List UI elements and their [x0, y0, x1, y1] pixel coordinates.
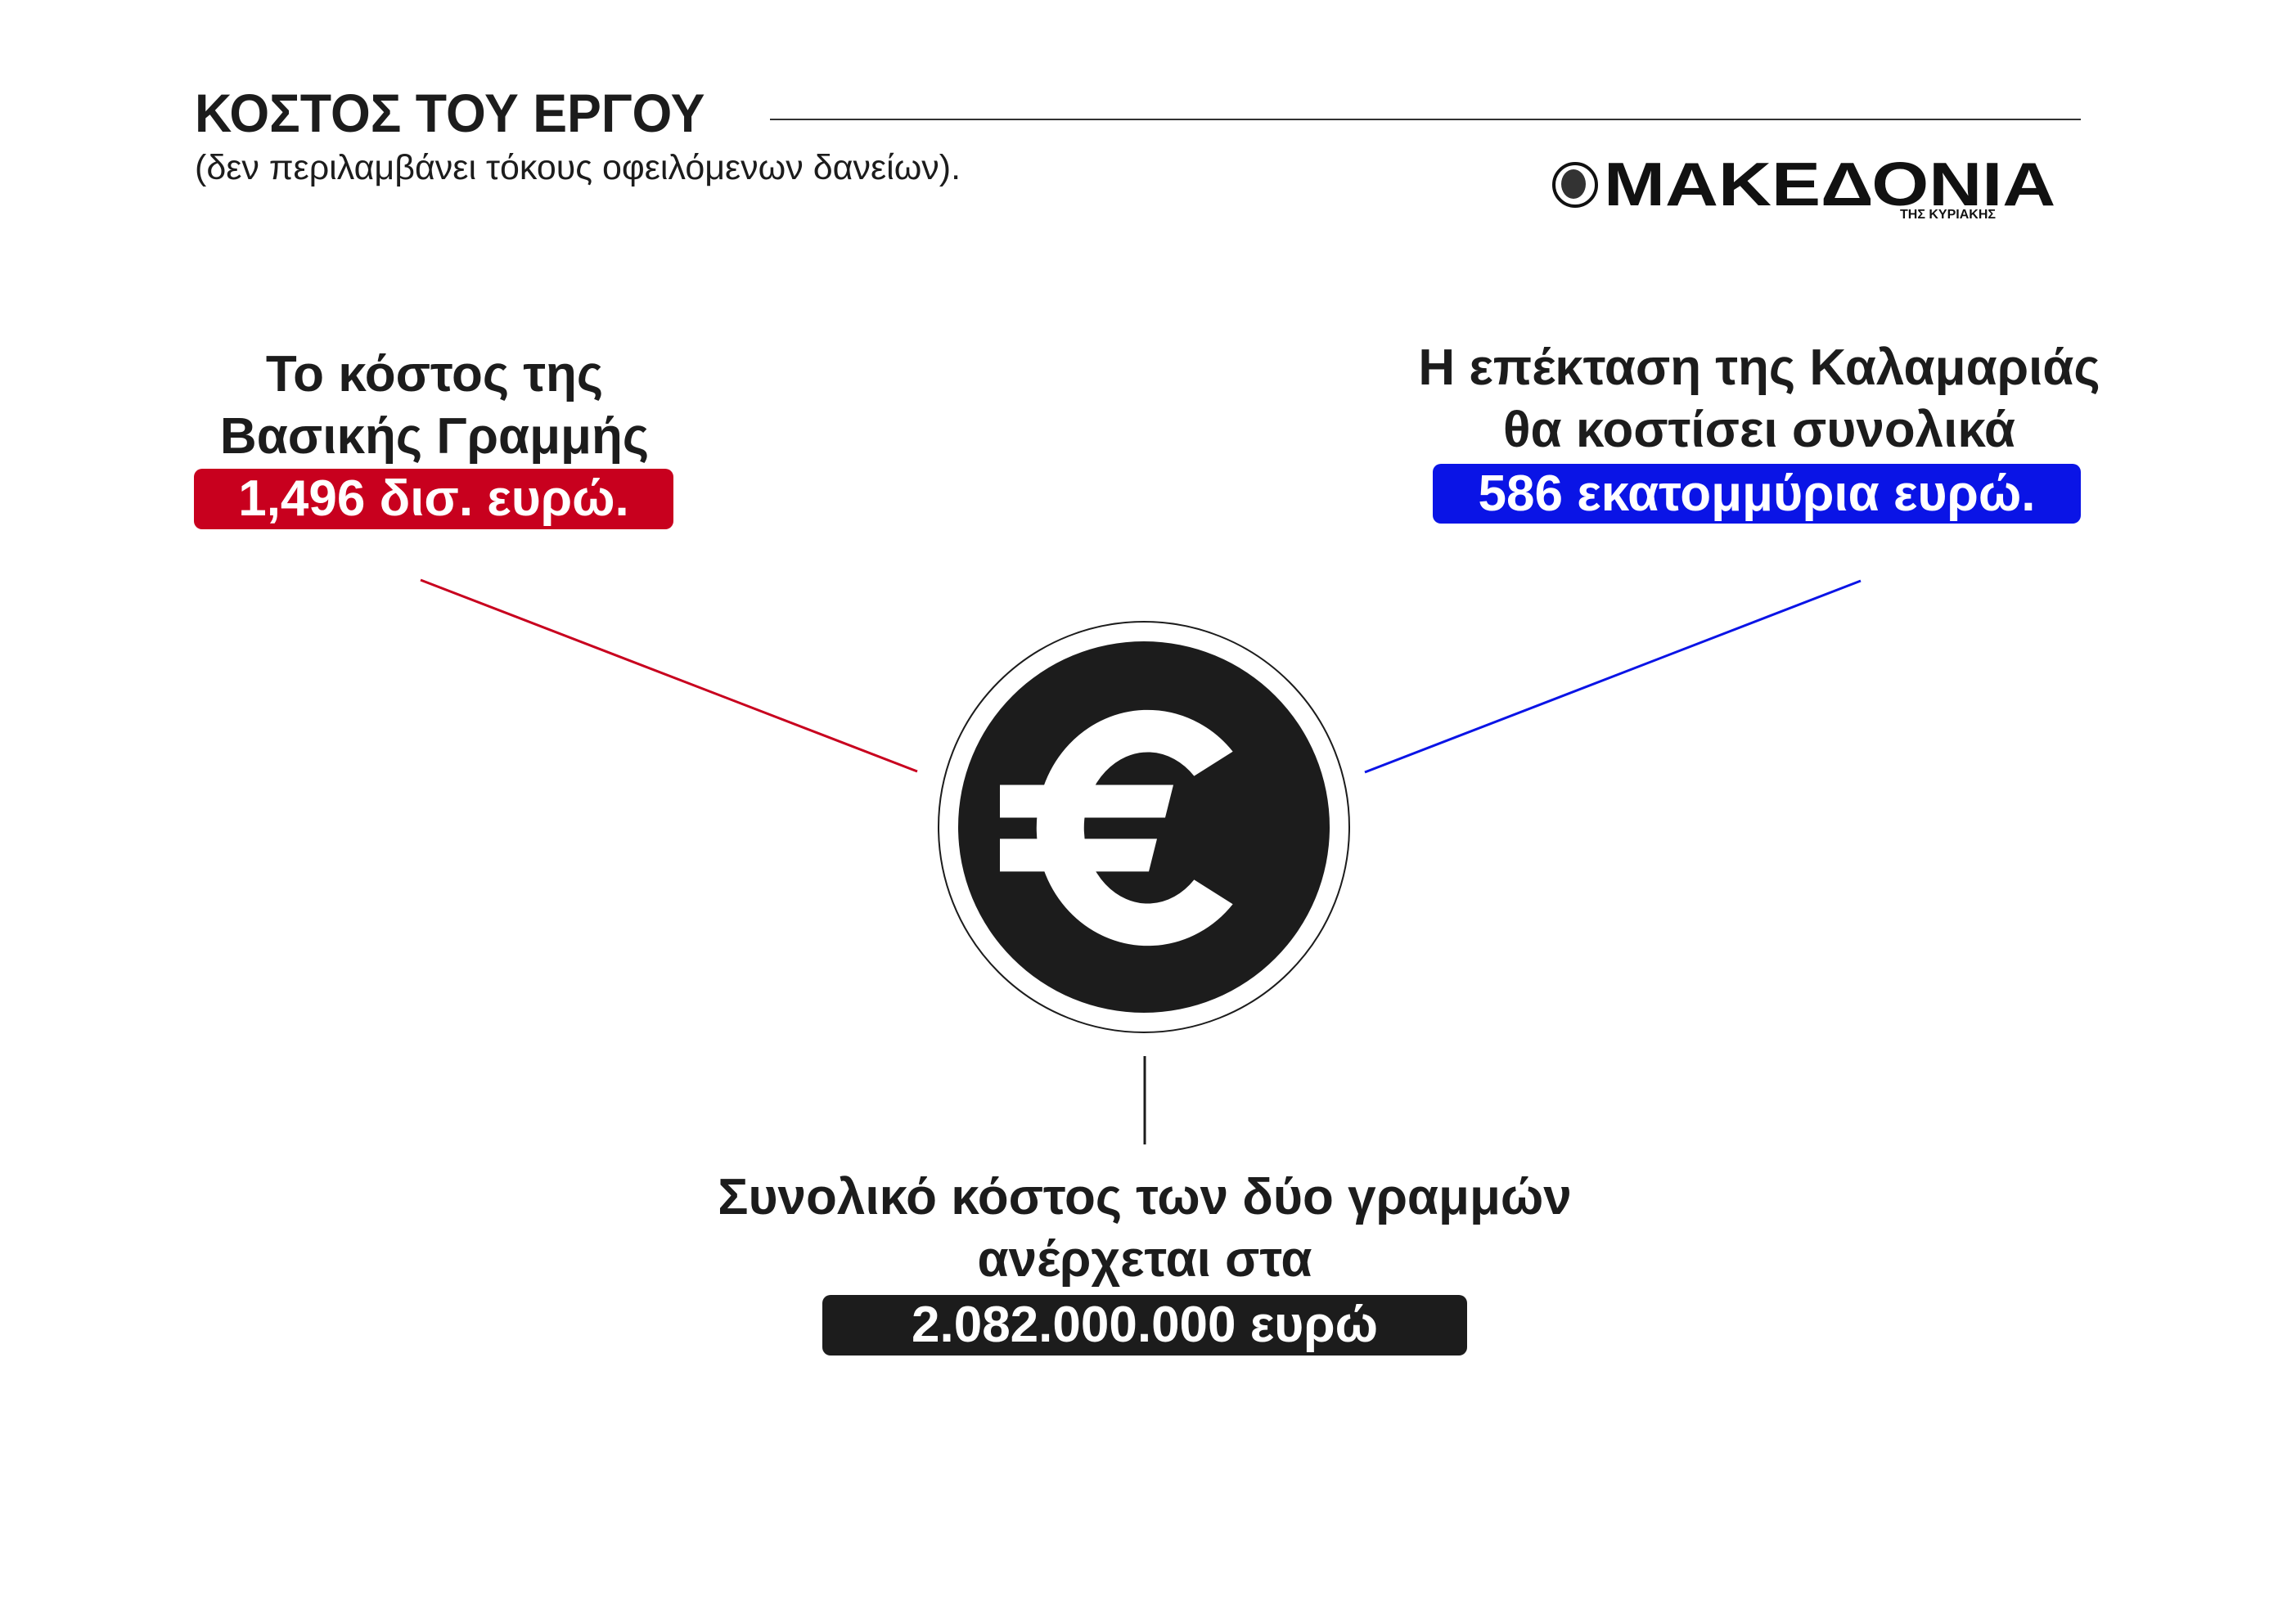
panel: Kalamaria extension [1418, 339, 2100, 524]
title: ΚΟΣΤΟΣ ΤΟΥ ΕΡΓΟΥ [195, 83, 705, 143]
heading: Βασικής Γραμμής [220, 408, 649, 465]
heading [220, 346, 649, 465]
value box black [822, 1295, 1467, 1355]
value box blue: 586 εκατομμύρια ευρώ. [1479, 465, 2035, 522]
icon: coin [1552, 162, 1598, 208]
value box red: 1,496 δισ. ευρώ. [238, 470, 629, 527]
logo text: ΜΑΚΕΔΟΝΙΑ [1604, 150, 2055, 218]
arrow: blue line [1365, 581, 1861, 772]
icon: euro coin [938, 621, 1350, 1033]
panel: total [718, 1169, 1572, 1355]
heading [1418, 339, 2100, 458]
logo [1552, 150, 2055, 222]
heading: ανέρχεται στα [977, 1231, 1312, 1288]
heading: Συνολικό κόστος των δύο γραμμών [718, 1169, 1572, 1225]
value box black: 2.082.000.000 ευρώ [912, 1297, 1378, 1353]
heading [718, 1169, 1572, 1288]
arrow: black line [1144, 1056, 1146, 1144]
heading: Το κόστος της [266, 346, 603, 402]
heading: θα κοστίσει συνολικά [1503, 402, 2015, 458]
logo subtitle: ΤΗΣ ΚΥΡΙΑΚΗΣ [1900, 208, 1996, 222]
subtitle: (δεν περιλαμβάνει τόκους οφειλόμενων δανείων). [195, 148, 961, 187]
panel: basic line [194, 346, 673, 529]
heading: Η επέκταση της Καλαμαριάς [1418, 339, 2100, 396]
arrow: red line [421, 580, 917, 771]
